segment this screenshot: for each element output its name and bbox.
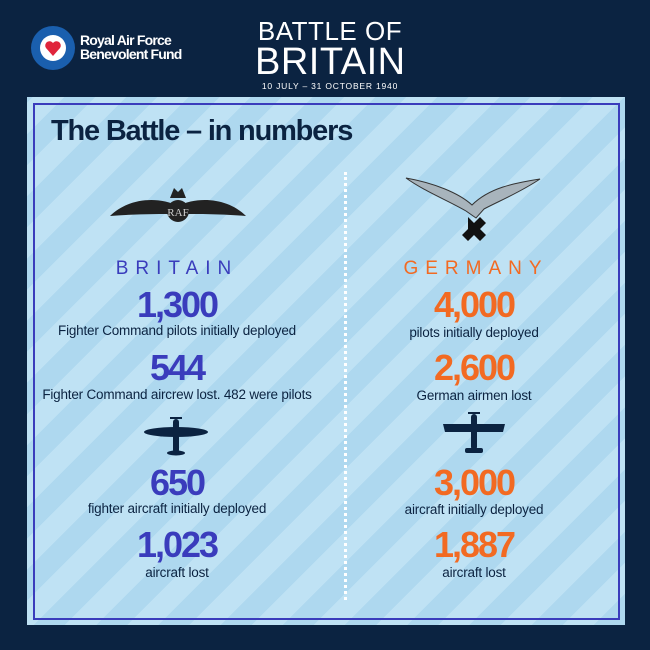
- divider dotted: [344, 172, 347, 600]
- text: 3,000: [434, 462, 514, 503]
- column: Germany: GERMANY: [403, 258, 549, 279]
- text: 544: [150, 347, 204, 388]
- text: 4,000: [434, 284, 514, 325]
- text: Fighter Command aircrew lost. 482 were pilots: [42, 387, 312, 402]
- panel: main striped: [27, 97, 625, 625]
- text: pilots initially deployed: [409, 325, 539, 340]
- text: 2,600: [434, 347, 514, 388]
- title: Battle of Britain: BRITAIN: [255, 41, 406, 83]
- text: Fighter Command pilots initially deployed: [58, 323, 296, 338]
- text: German airmen lost: [417, 388, 531, 403]
- icon: messerschmitt: [443, 412, 505, 453]
- icon: RAF wings: RAF: [167, 207, 189, 219]
- text: 1,023: [137, 524, 217, 565]
- logo: RAF Benevolent Fund: [31, 26, 182, 70]
- icon: spitfire: [144, 417, 208, 456]
- title: Battle of Britain: BATTLE OF: [258, 16, 402, 46]
- text: 1,300: [137, 284, 217, 325]
- logo: RAF Benevolent Fund: Royal Air Force: [80, 32, 171, 48]
- icon: RAF wings: [110, 188, 246, 222]
- text: 1,887: [434, 524, 514, 565]
- text: aircraft initially deployed: [405, 502, 543, 517]
- text: aircraft lost: [442, 565, 506, 580]
- text: aircraft lost: [145, 565, 209, 580]
- logo: RAF Benevolent Fund: Benevolent Fund: [80, 46, 182, 62]
- heading: The Battle – in numbers: [51, 115, 352, 147]
- title: Battle of Britain: 10 JULY – 31 OCTOBER 1940: [262, 81, 398, 91]
- text: fighter aircraft initially deployed: [88, 501, 266, 516]
- title: Battle of Britain: [255, 16, 406, 91]
- icon: eagle: [406, 178, 540, 241]
- text: 650: [150, 462, 204, 503]
- column: Britain: BRITAIN: [116, 258, 238, 279]
